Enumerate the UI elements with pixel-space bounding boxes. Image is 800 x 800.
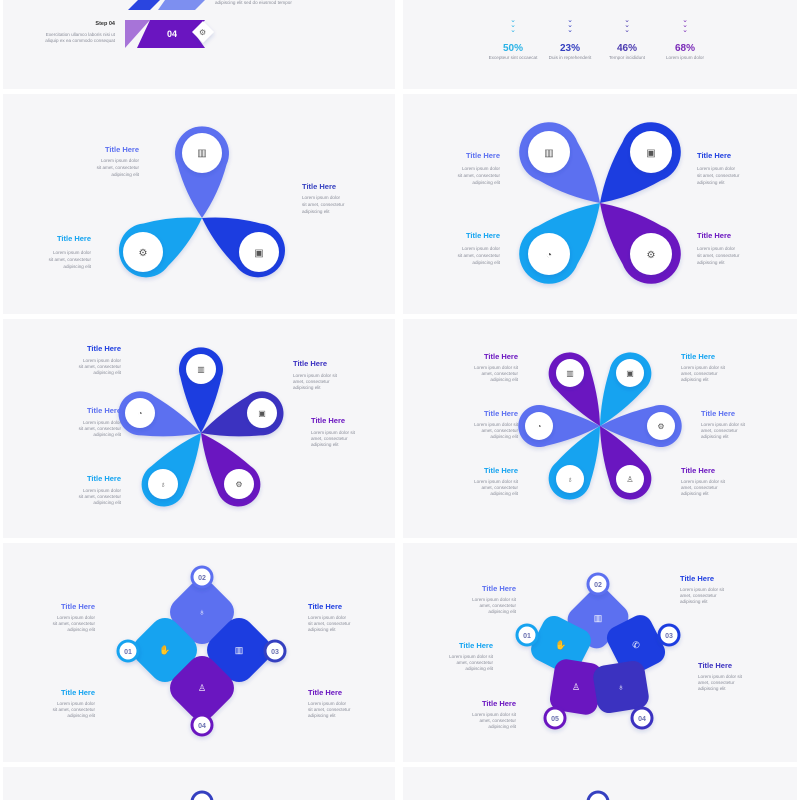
panel: 5 star: Lorem ipsum dolor sit — [472, 712, 517, 717]
panel: 4 petals: Title Here — [466, 151, 500, 160]
panel: 6 petals: adipiscing elit — [490, 491, 519, 496]
panel: 5 star: adipiscing elit — [488, 724, 517, 729]
panel: 4 petals: Lorem ipsum dolor — [462, 246, 500, 251]
panel: 6 petals: adipiscing elit — [681, 377, 709, 382]
panel: 6 petals: amet, consectetur — [481, 371, 518, 376]
panel: 4 petals: sit amet, consectetur — [697, 173, 740, 178]
panel: percentages (top-right): ⌄ — [682, 17, 688, 24]
panel: percentages (top-right): 50% — [503, 43, 523, 54]
panel: 3 petals: adipiscing elit — [111, 172, 140, 177]
panel: percentages (top-right): ⌄ — [510, 17, 516, 24]
panel: 4 diamond: ♙ — [198, 683, 206, 693]
panel: 4 diamond: Lorem ipsum dolor — [57, 701, 95, 706]
panel: percentages (top-right): Excepteur sint occaecat — [489, 55, 538, 60]
panel: 5 petals: adipiscing elit — [93, 370, 122, 375]
panel: 5 petals: Title Here — [311, 416, 345, 425]
panel: percentages (top-right): Lorem ipsum dolor — [666, 55, 704, 60]
panel: 5 star: 04 — [638, 716, 646, 723]
panel: percentages (top-right): 46% — [617, 43, 637, 54]
panel: 6 petals: ♙ — [626, 475, 634, 484]
panel: 5 petals: Title Here — [87, 474, 121, 483]
panel: 3 petals: Lorem ipsum dolor — [53, 250, 91, 255]
panel: 4 petals: Title Here — [697, 151, 731, 160]
panel: 6 petals: Lorem ipsum dolor sit — [474, 422, 519, 427]
panel: 4 diamond: Lorem ipsum dolor — [308, 615, 347, 620]
panel: 6 petals: Title Here — [681, 352, 715, 361]
panel: 4 diamond: adipiscing elit — [308, 713, 336, 718]
panel: 6 petals: ▣ — [626, 369, 634, 378]
panel: 6 petals: amet, consectetur — [681, 485, 718, 490]
panel: 5 petals: adipiscing elit — [311, 442, 339, 447]
panel: percentages (top-right): ⌄ — [510, 27, 516, 34]
panel: 4 petals: Lorem ipsum dolor — [697, 166, 736, 171]
panel: 5 star: amet, consectetur — [698, 680, 735, 685]
panel: 6 petals: Title Here — [681, 466, 715, 475]
panel: 3 petals — [49, 126, 345, 287]
panel: 4 diamond: Lorem ipsum dolor — [57, 615, 95, 620]
panel: 4 petals — [458, 110, 740, 296]
panel: 5 petals: ◔ — [138, 409, 143, 418]
panel: 4 diamond: Lorem ipsum dolor — [308, 701, 347, 706]
panel: 6 petals: adipiscing elit — [490, 377, 519, 382]
panel: 4 diamond: Title Here — [61, 602, 95, 611]
panel: 5 star: adipiscing elit — [698, 686, 726, 691]
panel: steps (top-left) — [45, 0, 292, 48]
panel: 5 petals: Lorem ipsum dolor sit — [293, 373, 338, 378]
panel: 5 star: Title Here — [482, 584, 516, 593]
panel: 4 diamond: Title Here — [61, 688, 95, 697]
panel: 6 petals: ◔ — [537, 422, 542, 431]
panel: percentages (top-right): Tempor incididunt — [609, 55, 646, 60]
panel: 5 petals: adipiscing elit — [293, 385, 321, 390]
panel: 3 petals: Title Here — [302, 182, 336, 191]
panel: steps (top-left): 04 — [167, 29, 177, 39]
panel: 6 petals: Lorem ipsum dolor sit — [474, 365, 519, 370]
panel: 3 petals: Title Here — [57, 234, 91, 243]
panel: steps (top-left): adipiscing elit sed do eiusmod tempor — [215, 0, 292, 5]
panel: 6 petals: amet, consectetur — [681, 371, 718, 376]
panel: 4 petals: ▥ — [544, 148, 554, 159]
panel: 5 petals: Lorem ipsum dolor — [83, 488, 121, 493]
panel: 3 petals: adipiscing elit — [302, 209, 330, 214]
panel: 6 petals: Lorem ipsum dolor sit — [681, 365, 726, 370]
panel: 5 star: 03 — [665, 633, 673, 640]
panel: 4 petals: Lorem ipsum dolor — [697, 246, 736, 251]
panel: 6 petals: adipiscing elit — [681, 491, 709, 496]
panel: 5 star: ▥ — [594, 613, 602, 623]
panel: 5 star: adipiscing elit — [680, 599, 708, 604]
panel: 5 star: ✆ — [632, 640, 640, 650]
panel: 5 star: ♙ — [572, 682, 580, 692]
panel: 6 petals: Lorem ipsum dolor sit — [701, 422, 746, 427]
panel: 4 petals: adipiscing elit — [472, 180, 501, 185]
panel: 4 diamond: adipiscing elit — [308, 627, 336, 632]
panel: 5 star: Lorem ipsum dolor sit — [449, 654, 494, 659]
panel: 4 diamond: 03 — [271, 649, 279, 656]
panel: 4 diamond: Title Here — [308, 688, 342, 697]
panel: 6 petals: amet, consectetur — [481, 428, 518, 433]
panel: percentages (top-right): ⌄ — [567, 22, 573, 29]
panel: 4 diamond: sit amet, consectetur — [308, 621, 351, 626]
panel: 4 petals: ◔ — [546, 250, 552, 261]
panel: 5 star: 05 — [551, 716, 559, 723]
panel: 5 petals: Lorem ipsum dolor — [83, 358, 121, 363]
panel: 4 diamond: 01 — [124, 649, 132, 656]
panel: 6 petals: ♁ — [567, 475, 573, 484]
panel: 4 diamond: sit amet, consectetur — [53, 621, 95, 626]
panel: percentages (top-right): 23% — [560, 43, 580, 54]
panel: 5 star: 02 — [594, 582, 602, 589]
panel: 3 petals: Lorem ipsum dolor — [101, 158, 139, 163]
panel: 6 petals: Lorem ipsum dolor sit — [474, 479, 519, 484]
panel: 6 petals: amet, consectetur — [481, 485, 518, 490]
panel: 5 petals: Title Here — [293, 359, 327, 368]
panel: 5 star: Lorem ipsum dolor sit — [698, 674, 743, 679]
panel: 4 petals: adipiscing elit — [697, 260, 725, 265]
panel: 5 petals: Title Here — [87, 344, 121, 353]
panel: 3 petals: adipiscing elit — [63, 264, 92, 269]
panel: percentages (top-right): ⌄ — [567, 17, 573, 24]
panel: 6 petals: Title Here — [484, 352, 518, 361]
panel: 5 petals: Lorem ipsum dolor — [83, 420, 121, 425]
panel: 3 petals: ▣ — [254, 248, 264, 259]
panel: 4 petals: adipiscing elit — [472, 260, 501, 265]
panel: 4 petals: Lorem ipsum dolor — [462, 166, 500, 171]
panel: 4 diamond: ♁ — [199, 607, 205, 617]
panel: 4 diamond: adipiscing elit — [67, 713, 96, 718]
panel: 4 petals: Title Here — [697, 231, 731, 240]
panel: percentages (top-right) — [489, 17, 704, 60]
panel: 6 petals: ▥ — [566, 369, 574, 378]
panel: percentages (top-right): 68% — [675, 43, 695, 54]
panel: percentages (top-right): ⌄ — [624, 27, 630, 34]
panel: 5 petals: ⚙ — [235, 480, 243, 489]
panel: percentages (top-right): Duis in reprehenderit — [549, 55, 592, 60]
panel: 3 petals: sit amet, consectetur — [302, 202, 345, 207]
panel: 5 petals: ♁ — [160, 480, 166, 489]
panel: 5 star — [449, 574, 743, 729]
panel: 4 petals: sit amet, consectetur — [697, 253, 740, 258]
panel: 6 petals: Title Here — [701, 409, 735, 418]
panel: 6 petals: Lorem ipsum dolor sit — [681, 479, 726, 484]
panel: 5 petals: Title Here — [87, 406, 121, 415]
panel: 5 petals: adipiscing elit — [93, 432, 122, 437]
panel: percentages (top-right): ⌄ — [682, 27, 688, 34]
panel: 4 petals: sit amet, consectetur — [458, 253, 500, 258]
panel: 5 petals: amet, consectetur — [293, 379, 330, 384]
panel: percentages (top-right): ⌄ — [510, 22, 516, 29]
panel: 6 petals: ⚙ — [657, 422, 665, 431]
panel: 6 petals: Title Here — [484, 409, 518, 418]
panel: 3 petals: ⚙ — [139, 248, 148, 259]
bottom partial circles — [192, 792, 608, 800]
panel: percentages (top-right): ⌄ — [567, 27, 573, 34]
panel: 6 petals — [474, 345, 746, 507]
panel: 5 star: adipiscing elit — [465, 666, 494, 671]
panel: 5 star: amet, consectetur — [456, 660, 493, 665]
panel: 5 star: 01 — [523, 633, 531, 640]
panel: 4 diamond: ✋ — [159, 644, 171, 655]
panel: 5 star: ✋ — [555, 639, 567, 650]
panel: 3 petals: Lorem ipsum dolor — [302, 195, 341, 200]
panel: 5 star: Title Here — [459, 641, 493, 650]
panel: 4 diamond: sit amet, consectetur — [53, 707, 95, 712]
panel: percentages (top-right): ⌄ — [624, 22, 630, 29]
panel: 4 diamond: Title Here — [308, 602, 342, 611]
panel: 6 petals: adipiscing elit — [701, 434, 729, 439]
panel: 5 star: amet, consectetur — [680, 593, 717, 598]
panel: 5 star: Lorem ipsum dolor sit — [680, 587, 725, 592]
panel: 5 petals: sit amet, consectetur — [79, 426, 121, 431]
panel: 6 petals: Title Here — [484, 466, 518, 475]
panel: 5 petals — [79, 344, 356, 515]
panel: 5 star: amet, consectetur — [479, 718, 516, 723]
panel: 5 petals: Lorem ipsum dolor sit — [311, 430, 356, 435]
panel: 4 diamond: 04 — [198, 723, 206, 730]
panel: steps (top-left): aliquip ex ea commodo consequat — [45, 38, 116, 43]
panel: 6 petals: adipiscing elit — [490, 434, 519, 439]
panel: 5 petals: sit amet, consectetur — [79, 364, 121, 369]
panel: 4 diamond: 02 — [198, 575, 206, 582]
panel: 5 petals: ▣ — [258, 409, 266, 418]
panel: 5 petals: sit amet, consectetur — [79, 494, 121, 499]
panel: 5 petals: amet, consectetur — [311, 436, 348, 441]
panel: 4 petals: Title Here — [466, 231, 500, 240]
panel: 3 petals: sit amet, consectetur — [97, 165, 139, 170]
panel: 5 star: Title Here — [680, 574, 714, 583]
panel: 3 petals: ▥ — [197, 148, 207, 159]
panel: 5 star: Title Here — [482, 699, 516, 708]
panel: 4 diamond: ▥ — [235, 645, 243, 655]
panel: 5 star: ♁ — [618, 682, 624, 692]
panel: 3 petals: sit amet, consectetur — [49, 257, 91, 262]
panel: percentages (top-right): ⌄ — [682, 22, 688, 29]
panel: 5 star: Title Here — [698, 661, 732, 670]
panel: 4 diamond: adipiscing elit — [67, 627, 96, 632]
panel: 4 diamond: sit amet, consectetur — [308, 707, 351, 712]
panel: 4 petals: adipiscing elit — [697, 180, 725, 185]
panel: steps (top-left): Exercitation ullamco laboris nisi ut — [46, 32, 116, 37]
panel: 4 diamond — [53, 567, 351, 735]
panel: 5 petals: adipiscing elit — [93, 500, 122, 505]
panel: steps (top-left): ⚙ — [199, 28, 206, 37]
panel: 4 petals: sit amet, consectetur — [458, 173, 500, 178]
panel: 5 star: amet, consectetur — [479, 603, 516, 608]
panel: 5 petals: ▥ — [197, 365, 205, 374]
panel: 4 petals: ⚙ — [647, 250, 656, 261]
panel: percentages (top-right): ⌄ — [624, 17, 630, 24]
panel: steps (top-left): Step 04 — [95, 21, 116, 27]
panel: 4 petals: ▣ — [646, 148, 656, 159]
panel: 5 star: adipiscing elit — [488, 609, 517, 614]
panel: 5 star: Lorem ipsum dolor sit — [472, 597, 517, 602]
panel: 6 petals: amet, consectetur — [701, 428, 738, 433]
panel: 3 petals: Title Here — [105, 145, 139, 154]
